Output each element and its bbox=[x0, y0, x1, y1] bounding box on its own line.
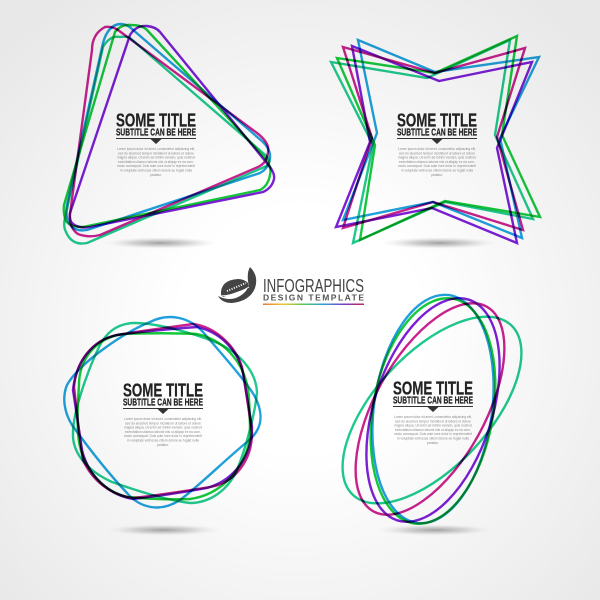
title: SOME TITLE bbox=[397, 110, 477, 130]
body text bbox=[394, 415, 472, 445]
outlines: star bbox=[331, 36, 540, 243]
text block: circle bbox=[123, 380, 203, 447]
body text: modo consequat. Duis aute irure dolor in reprehenderit bbox=[398, 164, 476, 168]
icon: logo mark bbox=[218, 267, 256, 303]
title: SOME TITLE bbox=[123, 380, 203, 400]
body text: Lorem ipsum dolor sit amet, consectetur adipiscing elit, bbox=[398, 147, 476, 151]
divider with pointer bbox=[393, 406, 473, 412]
body text: magna aliqua. Ut enim ad minim veniam, quis nostrud bbox=[124, 426, 202, 430]
body text: in voluptate velit esse cillum dolore eu fugiat nulla bbox=[397, 436, 469, 440]
body text: exercitation ullamco laboris nisi ut aliquip ex ea com- bbox=[395, 428, 472, 432]
body text: magna aliqua. Ut enim ad minim veniam, quis nostrud bbox=[117, 156, 195, 160]
panel: triangle bbox=[64, 24, 274, 249]
shadow: ellipses bbox=[375, 524, 495, 536]
body text bbox=[117, 147, 195, 177]
body text: sed do eiusmod tempor incididunt ut labore et dolore bbox=[395, 419, 471, 423]
body text: pariatur. bbox=[150, 173, 162, 177]
panel: ellipses bbox=[311, 280, 553, 539]
body text: in voluptate velit esse cillum dolore eu fugiat nulla bbox=[401, 168, 473, 172]
body text: modo consequat. Duis aute irure dolor in reprehenderit bbox=[124, 434, 202, 438]
shadow: triangle bbox=[102, 237, 218, 249]
outlines: circle bbox=[64, 317, 261, 507]
body text bbox=[398, 147, 476, 177]
body text: pariatur. bbox=[157, 443, 169, 447]
title: SOME TITLE bbox=[393, 378, 473, 398]
title: SOME TITLE bbox=[116, 110, 196, 130]
body text: exercitation ullamco laboris nisi ut aliquip ex ea com- bbox=[125, 430, 202, 434]
body text: pariatur. bbox=[431, 173, 443, 177]
panel: star bbox=[331, 36, 540, 249]
body text: modo consequat. Duis aute irure dolor in reprehenderit bbox=[117, 164, 195, 168]
body text: exercitation ullamco laboris nisi ut aliquip ex ea com- bbox=[118, 160, 195, 164]
body text: in voluptate velit esse cillum dolore eu fugiat nulla bbox=[127, 438, 199, 442]
subtitle: SUBTITLE CAN BE HERE bbox=[393, 396, 473, 406]
divider with pointer bbox=[123, 408, 203, 414]
subtitle: SUBTITLE CAN BE HERE bbox=[116, 128, 196, 138]
body text: in voluptate velit esse cillum dolore eu fugiat nulla bbox=[120, 168, 192, 172]
subtitle: SUBTITLE CAN BE HERE bbox=[123, 398, 203, 408]
divider with pointer bbox=[397, 138, 477, 144]
outlines: ellipses bbox=[311, 280, 553, 539]
body text: pariatur. bbox=[427, 441, 439, 445]
divider with pointer bbox=[116, 138, 196, 144]
body text: modo consequat. Duis aute irure dolor in reprehenderit bbox=[394, 432, 472, 436]
body text: sed do eiusmod tempor incididunt ut labore et dolore bbox=[399, 151, 475, 155]
body text bbox=[124, 417, 202, 447]
body text: Lorem ipsum dolor sit amet, consectetur adipiscing elit, bbox=[394, 415, 472, 419]
body text: exercitation ullamco laboris nisi ut aliquip ex ea com- bbox=[399, 160, 476, 164]
body text: magna aliqua. Ut enim ad minim veniam, quis nostrud bbox=[394, 424, 472, 428]
body text: Lorem ipsum dolor sit amet, consectetur adipiscing elit, bbox=[117, 147, 195, 151]
logo bbox=[218, 267, 364, 305]
shadow: circle bbox=[103, 524, 223, 536]
outlines: triangle bbox=[64, 24, 274, 244]
text block: triangle bbox=[116, 110, 196, 177]
rainbow bar bbox=[263, 304, 364, 305]
body text: magna aliqua. Ut enim ad minim veniam, quis nostrud bbox=[398, 156, 476, 160]
body text: sed do eiusmod tempor incididunt ut labore et dolore bbox=[118, 151, 194, 155]
panel: wobbly circle bbox=[64, 317, 261, 536]
logo subtitle: DESIGN TEMPLATE bbox=[263, 292, 364, 302]
logo title: INFOGRAPHICS bbox=[263, 275, 364, 296]
shadow: star bbox=[380, 237, 500, 249]
text block: ellipses bbox=[393, 378, 473, 445]
text block: star bbox=[397, 110, 477, 177]
body text: sed do eiusmod tempor incididunt ut labore et dolore bbox=[125, 421, 201, 425]
subtitle: SUBTITLE CAN BE HERE bbox=[397, 128, 477, 138]
body text: Lorem ipsum dolor sit amet, consectetur adipiscing elit, bbox=[124, 417, 202, 421]
